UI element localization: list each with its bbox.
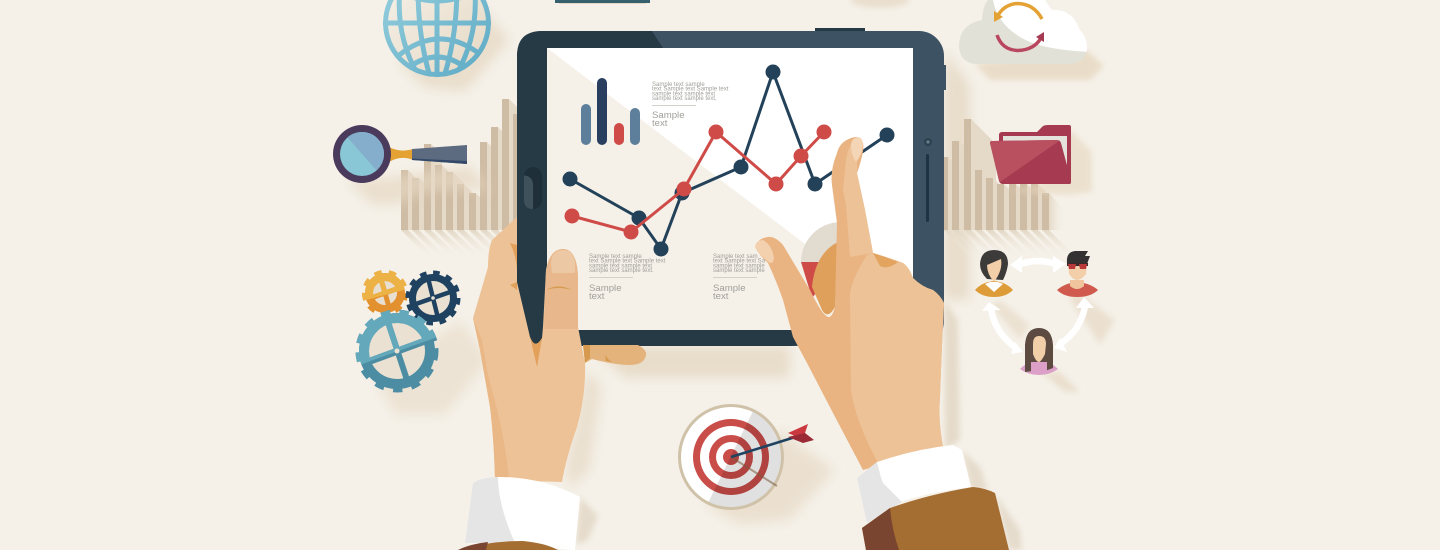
text block: bottom left: sample text sample text. xyxy=(589,268,654,274)
orange gear xyxy=(364,272,406,314)
red series xyxy=(564,124,832,240)
tablet home pill xyxy=(524,167,542,209)
left hand xyxy=(473,217,646,490)
illustration xyxy=(333,0,1114,550)
icon: magnifying glass xyxy=(333,125,490,205)
gauge chart xyxy=(801,222,841,298)
left jacket sleeve xyxy=(458,541,558,550)
index finger highlight xyxy=(843,138,873,257)
text block: bottom left xyxy=(589,254,666,302)
screen xyxy=(547,48,913,330)
text block: top: sample text sample text, xyxy=(652,96,717,102)
text block: bottom middle: sample text sample xyxy=(713,263,765,269)
text block: top: Sample text sample xyxy=(652,82,705,88)
text block: bottom middle: text xyxy=(713,291,729,302)
tablet xyxy=(517,28,946,346)
small object at top edge xyxy=(850,0,910,8)
person: man with sunglasses xyxy=(1057,251,1098,297)
teal gear xyxy=(358,312,436,390)
text block: bottom middle: text Sample text Sa xyxy=(713,259,766,265)
web of hand xyxy=(812,243,838,314)
text block: bottom left: Sample text sample xyxy=(589,254,642,260)
circular white arrows xyxy=(982,256,1094,354)
text block: bottom left: sample text sample text xyxy=(589,263,652,269)
thumb xyxy=(544,249,578,329)
fingers behind tablet xyxy=(583,345,646,365)
text block: top: Sample xyxy=(652,110,685,121)
mini bar chart xyxy=(581,78,640,145)
bar chart backdrop: right xyxy=(944,119,1075,260)
text block: bottom middle: Sample xyxy=(713,283,746,294)
icon: cloud with sync arrows xyxy=(959,0,1104,80)
back of hand xyxy=(850,253,944,463)
icon: book edge at top xyxy=(555,0,650,4)
right hand xyxy=(755,137,960,470)
tablet camera and slot xyxy=(924,138,932,222)
tablet side buttons xyxy=(815,28,946,90)
text block: top: text Sample text Sample text xyxy=(652,87,729,93)
person: woman with short hair xyxy=(975,250,1013,297)
text block: bottom middle xyxy=(713,254,766,302)
people network xyxy=(975,250,1115,392)
navy gear xyxy=(408,273,458,323)
text block: top: text xyxy=(652,118,668,129)
icon: globe xyxy=(383,0,510,92)
text block: bottom left: text xyxy=(589,291,605,302)
text block: bottom left: Sample xyxy=(589,283,622,294)
left shirt cuff xyxy=(465,477,598,550)
right jacket sleeve xyxy=(862,487,1022,550)
icon: target with arrow xyxy=(678,404,835,525)
text block: bottom middle: sample text sample xyxy=(713,268,765,274)
text block: top xyxy=(652,82,729,129)
navy series xyxy=(562,64,894,256)
person: woman with long hair xyxy=(1020,328,1058,375)
text block: top: sample text sample text xyxy=(652,91,715,97)
tablet shadow xyxy=(590,50,970,378)
text block: bottom middle: Sample text sam xyxy=(713,254,758,260)
line chart xyxy=(562,64,894,256)
text block: bottom left: text Sample text Sample text xyxy=(589,259,666,265)
right shirt cuff xyxy=(857,445,988,523)
icon: gears xyxy=(358,272,490,415)
bar chart backdrop: left xyxy=(401,99,528,260)
icon: folder xyxy=(990,125,1092,195)
